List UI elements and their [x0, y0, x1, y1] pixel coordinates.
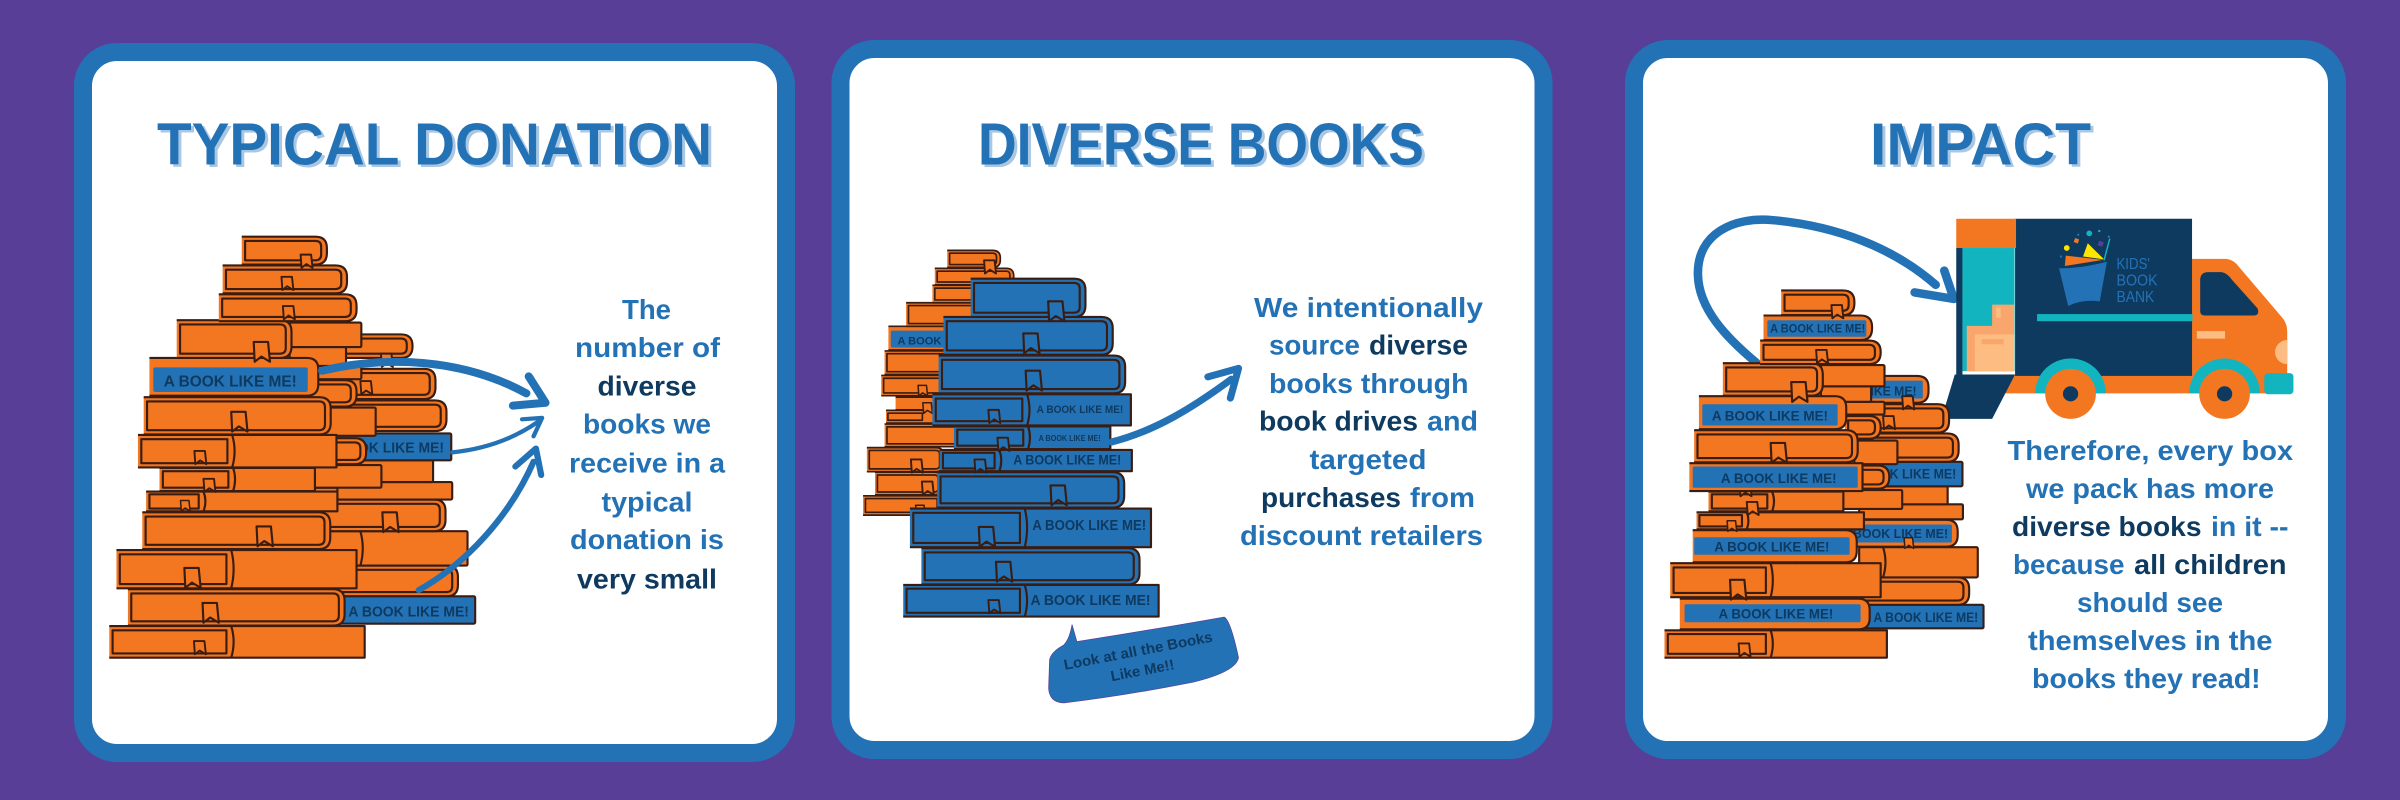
text: number of diverse books: very small — [577, 563, 717, 594]
text: intentionally source diverse books: targeted — [1310, 444, 1426, 475]
text: every box has more diverse books: in it -- — [2211, 511, 2288, 542]
text: number of diverse books: diverse — [598, 371, 696, 402]
highlighted book — [1689, 463, 1862, 496]
text: intentionally source diverse books — [1240, 292, 1483, 551]
text: intentionally source diverse books: diverse — [1369, 330, 1468, 361]
blue book with label — [940, 450, 1132, 473]
text: every box has more diverse books: because — [2013, 549, 2124, 580]
logo: kids' book bank — [2059, 230, 2158, 306]
blue book with label: A BOOK LIKE ME! — [1030, 592, 1151, 609]
cargo box body — [2015, 219, 2192, 376]
arrow: books to text — [1112, 368, 1239, 442]
truck cab — [2189, 259, 2287, 382]
panel frame — [840, 49, 1544, 750]
blue book: partly hidden label — [299, 433, 451, 460]
text: intentionally source diverse books: We intentionally — [1254, 292, 1483, 323]
blue book with label: A BOOK LIKE ME! — [1013, 453, 1121, 468]
text: intentionally source diverse books: purchases — [1261, 482, 1401, 513]
bumper — [2264, 373, 2293, 394]
door handle — [2197, 331, 2225, 339]
speech bubble: Look at all the Books — [1063, 630, 1214, 674]
highlighted book — [1763, 315, 1872, 340]
blue book: a book like me — [299, 596, 475, 624]
blue book: partly hidden label: A BOOK LIKE ME! — [324, 439, 444, 456]
heading: typical donation: TYPICAL DONATION — [160, 114, 715, 180]
text: intentionally source diverse books: and — [1427, 406, 1478, 437]
heading: typical donation: TYPICAL DONATION — [157, 112, 712, 178]
back stack of books — [299, 334, 475, 624]
text: every box has more diverse books — [2008, 435, 2294, 694]
orange book with partly hidden label: A BOOK LIKE ME! — [1811, 384, 1917, 399]
panel: impact — [1634, 49, 2337, 750]
orange book with partly hidden label — [1811, 376, 1929, 409]
panel frame — [83, 52, 786, 753]
blue book: partly hidden label — [1850, 462, 1962, 486]
front stack of books — [1664, 290, 1887, 658]
text: intentionally source diverse books: books through — [1269, 368, 1468, 399]
heading: impact: IMPACT — [1870, 112, 2091, 178]
arrow: books to truck — [1698, 220, 1954, 363]
text: number of diverse books: The — [622, 294, 671, 325]
orange book with label — [888, 326, 993, 350]
text: intentionally source diverse books: book drives — [1259, 406, 1418, 437]
blue book with label — [932, 394, 1131, 425]
rear wheel — [2189, 358, 2260, 419]
blue book with label: A BOOK LIKE ME! — [1032, 518, 1146, 534]
front stack of books — [109, 237, 365, 658]
illustration: arrow, truck and books — [1664, 219, 2293, 658]
text: number of diverse books: donation is — [570, 524, 724, 555]
blue book with label — [903, 585, 1159, 617]
highlighted book: A BOOK LIKE ME! — [1719, 607, 1833, 622]
highlighted book — [1693, 530, 1857, 563]
logo: kids' book bank: BANK — [2116, 288, 2154, 306]
text: every box has more diverse books: should see — [2077, 587, 2223, 618]
text: number of diverse books: receive in a — [569, 448, 725, 479]
highlighted book: A BOOK LIKE ME! — [1770, 322, 1865, 335]
arrow: middle book to text — [452, 418, 542, 452]
highlighted book: A BOOK LIKE ME! — [1712, 408, 1828, 424]
delivery truck — [1941, 219, 2293, 419]
middle stack of books — [290, 323, 381, 502]
text: every box has more diverse books: books they read! — [2032, 663, 2261, 694]
text: number of diverse books: books we — [583, 408, 711, 440]
blue book: a book like me: A BOOK LIKE ME! — [1873, 610, 1978, 625]
panel: typical donation — [83, 52, 786, 753]
arrow: top book to text — [322, 362, 545, 406]
text: every box has more diverse books: themselves in the — [2028, 625, 2272, 656]
text: number of diverse books: number of — [575, 332, 721, 363]
front wheel — [2035, 358, 2106, 419]
highlighted book: A BOOK LIKE ME! — [1721, 471, 1837, 487]
open back door — [1956, 219, 2016, 375]
arrow: bottom book to text — [419, 449, 541, 590]
heading: impact: IMPACT — [1873, 114, 2094, 180]
heading: diverse books: DIVERSE BOOKS — [981, 114, 1427, 180]
orange book with label: A BOOK LIKE ME! — [897, 335, 993, 347]
small blue book with label — [954, 426, 1110, 451]
highlighted book — [1699, 396, 1846, 429]
headlight — [2275, 340, 2287, 364]
teal stripe — [2037, 314, 2193, 321]
blue book: a book like me — [1859, 605, 1984, 628]
heading: diverse books: DIVERSE BOOKS — [978, 112, 1424, 178]
text: intentionally source diverse books: from — [1410, 482, 1475, 513]
text: intentionally source diverse books: discount retailers — [1240, 520, 1483, 551]
cab window — [2200, 272, 2258, 315]
middle stack of books — [1821, 365, 1902, 509]
text: every box has more diverse books: diverse books — [2012, 511, 2202, 542]
highlighted book: a book like me: A BOOK LIKE ME! — [164, 372, 297, 390]
highlighted book: a book like me — [149, 358, 318, 396]
illustration: book stacks, arrow, speech bubble — [863, 250, 1239, 703]
blue book with label: A BOOK LIKE ME! — [1037, 404, 1123, 416]
text: number of diverse books: typical — [602, 486, 692, 517]
blue book: a book like me: A BOOK LIKE ME! — [348, 604, 469, 621]
orange book with label: A BOOK LIKE ME! — [1841, 526, 1948, 541]
highlighted book — [1680, 599, 1870, 629]
blue book with label — [910, 509, 1151, 547]
text: intentionally source diverse books: source — [1269, 330, 1360, 361]
chassis — [2003, 374, 2287, 393]
illustration: book stacks and arrows — [109, 237, 545, 658]
orange book with label — [1835, 520, 1958, 548]
text: every box has more diverse books: all children — [2134, 549, 2287, 580]
text: every box has more diverse books: Therefore, every box — [2008, 435, 2294, 466]
text: every box has more diverse books: we pack has more — [2025, 473, 2274, 504]
panel: diverse books — [840, 49, 1544, 750]
loading ramp — [1941, 374, 2015, 419]
speech bubble — [1049, 617, 1239, 703]
back stack of books — [1811, 376, 1984, 628]
blue book: partly hidden label: A BOOK LIKE ME! — [1850, 466, 1956, 481]
small blue book with label: A BOOK LIKE ME! — [1039, 434, 1101, 443]
logo: kids' book bank: BOOK — [2116, 271, 2158, 289]
logo: kids' book bank: KIDS' — [2116, 255, 2150, 273]
front stack of blue books — [903, 279, 1159, 617]
panel frame — [1634, 49, 2337, 750]
back stack of orange books — [863, 250, 1014, 516]
highlighted book: A BOOK LIKE ME! — [1714, 540, 1829, 555]
text: number of diverse books — [569, 294, 725, 594]
speech bubble: Like Me!! — [1109, 657, 1176, 685]
